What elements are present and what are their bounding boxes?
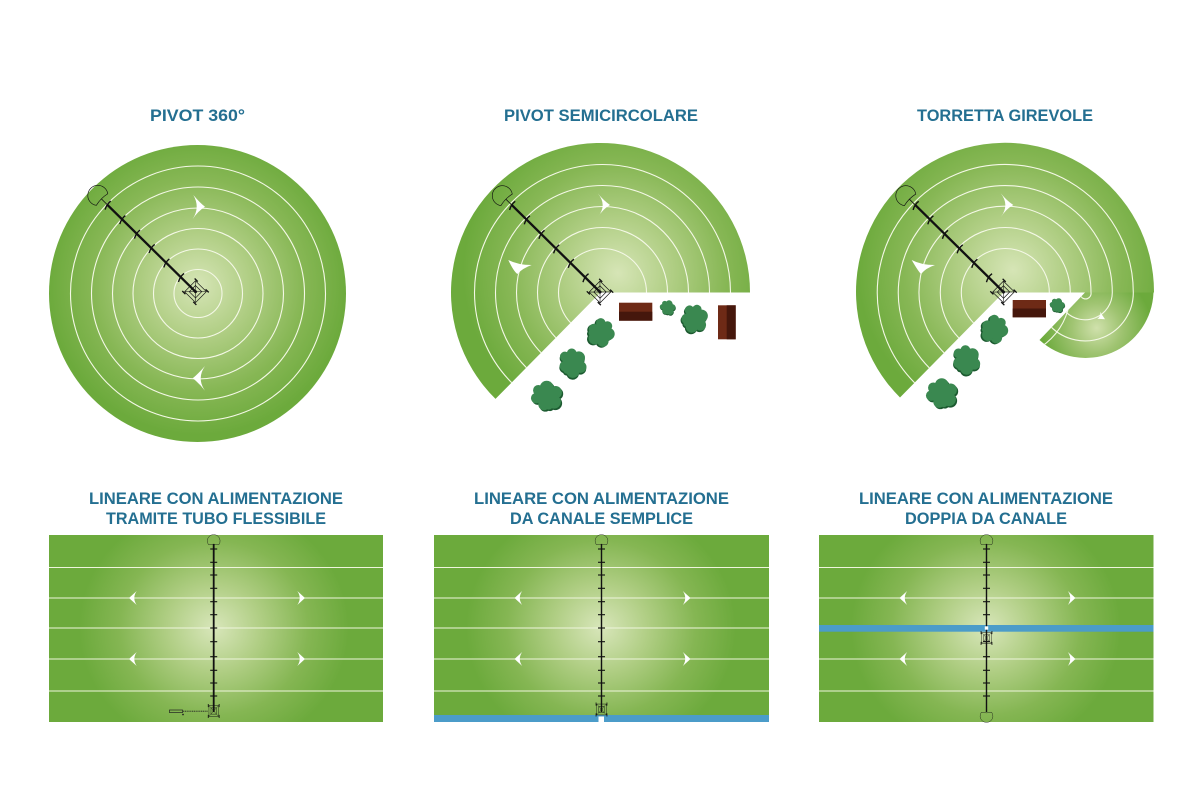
- linear arm: [980, 535, 993, 722]
- sector field: [451, 143, 750, 399]
- pivot arm: [892, 181, 1018, 306]
- main sector field: [856, 143, 1154, 398]
- trees: [531, 298, 713, 412]
- furrow lines: [49, 568, 383, 691]
- title: pivot semicircolare: PIVOT SEMICIRCOLARE: [504, 107, 698, 125]
- panel: pivot 360: [49, 107, 346, 442]
- arrows: [129, 591, 305, 666]
- title: lineare canale semplice: DA CANALE SEMPLICE: [510, 510, 693, 528]
- field: [49, 535, 383, 722]
- buildings: [619, 303, 736, 339]
- pivot arm: [84, 181, 210, 306]
- arrows: [514, 591, 690, 666]
- furrow lines: [434, 568, 769, 691]
- title: lineare doppia: DOPPIA DA CANALE: [905, 510, 1067, 528]
- secondary sector field: [1040, 292, 1154, 358]
- flexible hose: [170, 710, 208, 715]
- panel: lineare canale semplice: [434, 490, 769, 722]
- linear arm: [595, 535, 608, 722]
- arrow: forward: [598, 193, 610, 217]
- concentric rings: [70, 166, 326, 421]
- field: [434, 535, 769, 722]
- arrow: clockwise top: [193, 195, 205, 219]
- title: lineare tubo flessibile: [89, 490, 343, 528]
- canal: [819, 625, 1154, 632]
- linear arm: [207, 535, 220, 718]
- rings: [474, 164, 732, 383]
- arrow: clockwise bottom: [193, 366, 205, 391]
- trees: [926, 296, 1067, 409]
- rings: [877, 164, 1133, 383]
- field: [819, 535, 1154, 722]
- title: lineare tubo flessibile: LINEARE CON ALIMENTAZIONE: [89, 490, 343, 508]
- panel: torretta girevole: [856, 107, 1154, 409]
- title: pivot 360: PIVOT 360°: [150, 107, 245, 125]
- building: [1013, 300, 1046, 317]
- circular field: [49, 145, 346, 442]
- panel: lineare tubo flessibile: [49, 490, 383, 722]
- title: lineare canale semplice: [474, 490, 729, 528]
- arrow: return: [912, 260, 935, 274]
- title: lineare doppia: [859, 490, 1113, 528]
- pivot arm: [488, 181, 614, 306]
- title: lineare doppia: LINEARE CON ALIMENTAZIONE: [859, 490, 1113, 508]
- panel: pivot semicircolare: [451, 107, 750, 420]
- furrow lines: [819, 568, 1154, 691]
- arrows: [900, 591, 1076, 666]
- arrow: small: [1097, 312, 1105, 319]
- title: lineare canale semplice: LINEARE CON ALIMENTAZIONE: [474, 490, 729, 508]
- arrow: forward: [1001, 193, 1013, 217]
- panel: lineare doppia da canale: [819, 490, 1154, 722]
- canal: [434, 715, 769, 722]
- arrow: return: [508, 260, 532, 274]
- title: torretta girevole: TORRETTA GIREVOLE: [917, 107, 1093, 125]
- title: lineare tubo flessibile: TRAMITE TUBO FLESSIBILE: [106, 510, 326, 528]
